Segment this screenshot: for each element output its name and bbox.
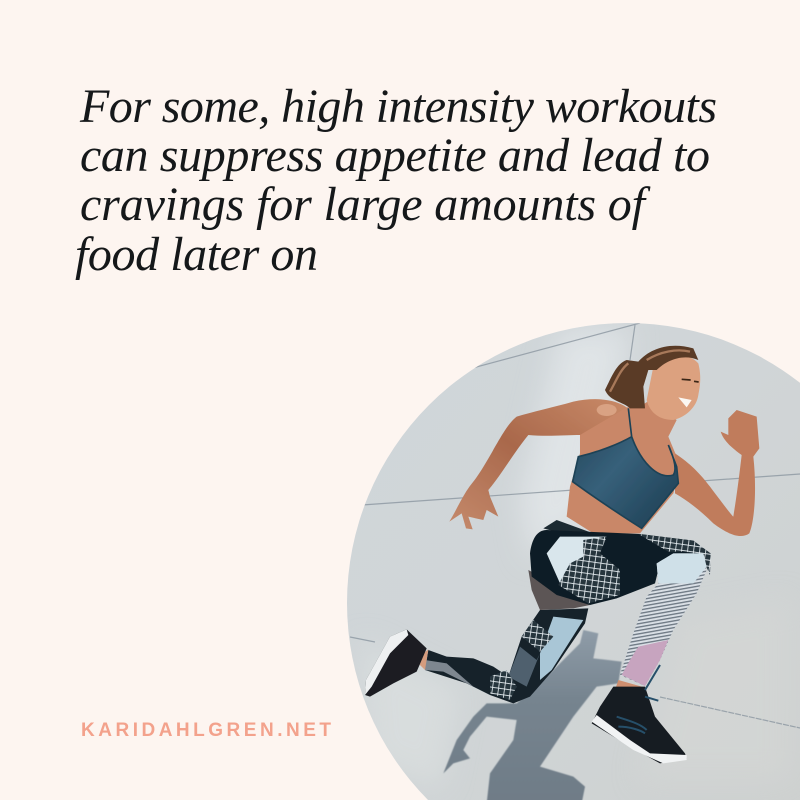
front shoe laces xyxy=(617,665,660,733)
headline: food later on xyxy=(75,228,318,281)
thigh pale panel xyxy=(547,537,607,583)
shin pale panel xyxy=(657,553,707,583)
headline xyxy=(75,80,717,281)
rear calf stripe xyxy=(425,660,473,687)
front arm xyxy=(675,410,759,536)
runner legs xyxy=(365,520,711,763)
thigh grid panel xyxy=(558,537,620,603)
smile xyxy=(678,397,692,407)
waistband xyxy=(543,520,590,532)
striped shin xyxy=(620,553,707,686)
hair highlights xyxy=(610,350,690,392)
rear leg grid panel xyxy=(490,620,553,700)
concrete wall xyxy=(340,320,800,800)
rear ankle xyxy=(420,650,428,670)
shoulder highlight xyxy=(597,404,617,416)
circular photo: runner jumping against concrete wall xyxy=(340,320,800,800)
rear leg grey panel xyxy=(508,647,540,687)
torso xyxy=(567,400,678,533)
runner upper body xyxy=(449,346,759,536)
rear leg pale panel xyxy=(540,617,583,680)
front thigh xyxy=(530,530,710,605)
rear shoe sole xyxy=(365,629,408,695)
hair xyxy=(605,346,698,408)
front shoe sole xyxy=(592,715,687,763)
back arm xyxy=(449,399,630,529)
pink galaxy patch xyxy=(622,640,668,686)
hip panel xyxy=(528,570,590,610)
shadow on wall xyxy=(443,630,622,800)
headline: can suppress appetite and lead to xyxy=(80,129,710,182)
rear leg xyxy=(425,608,588,703)
headline: cravings for large amounts of xyxy=(80,178,651,231)
front shoe xyxy=(592,687,687,763)
sports bra xyxy=(573,408,678,528)
head xyxy=(647,355,700,420)
knee grid xyxy=(638,534,711,575)
eyes xyxy=(682,379,699,382)
website credit: KARIDAHLGREN.NET xyxy=(81,720,331,741)
headline: For some, high intensity workouts xyxy=(79,80,717,133)
front ankle xyxy=(615,680,642,695)
rear shoe xyxy=(365,629,427,697)
